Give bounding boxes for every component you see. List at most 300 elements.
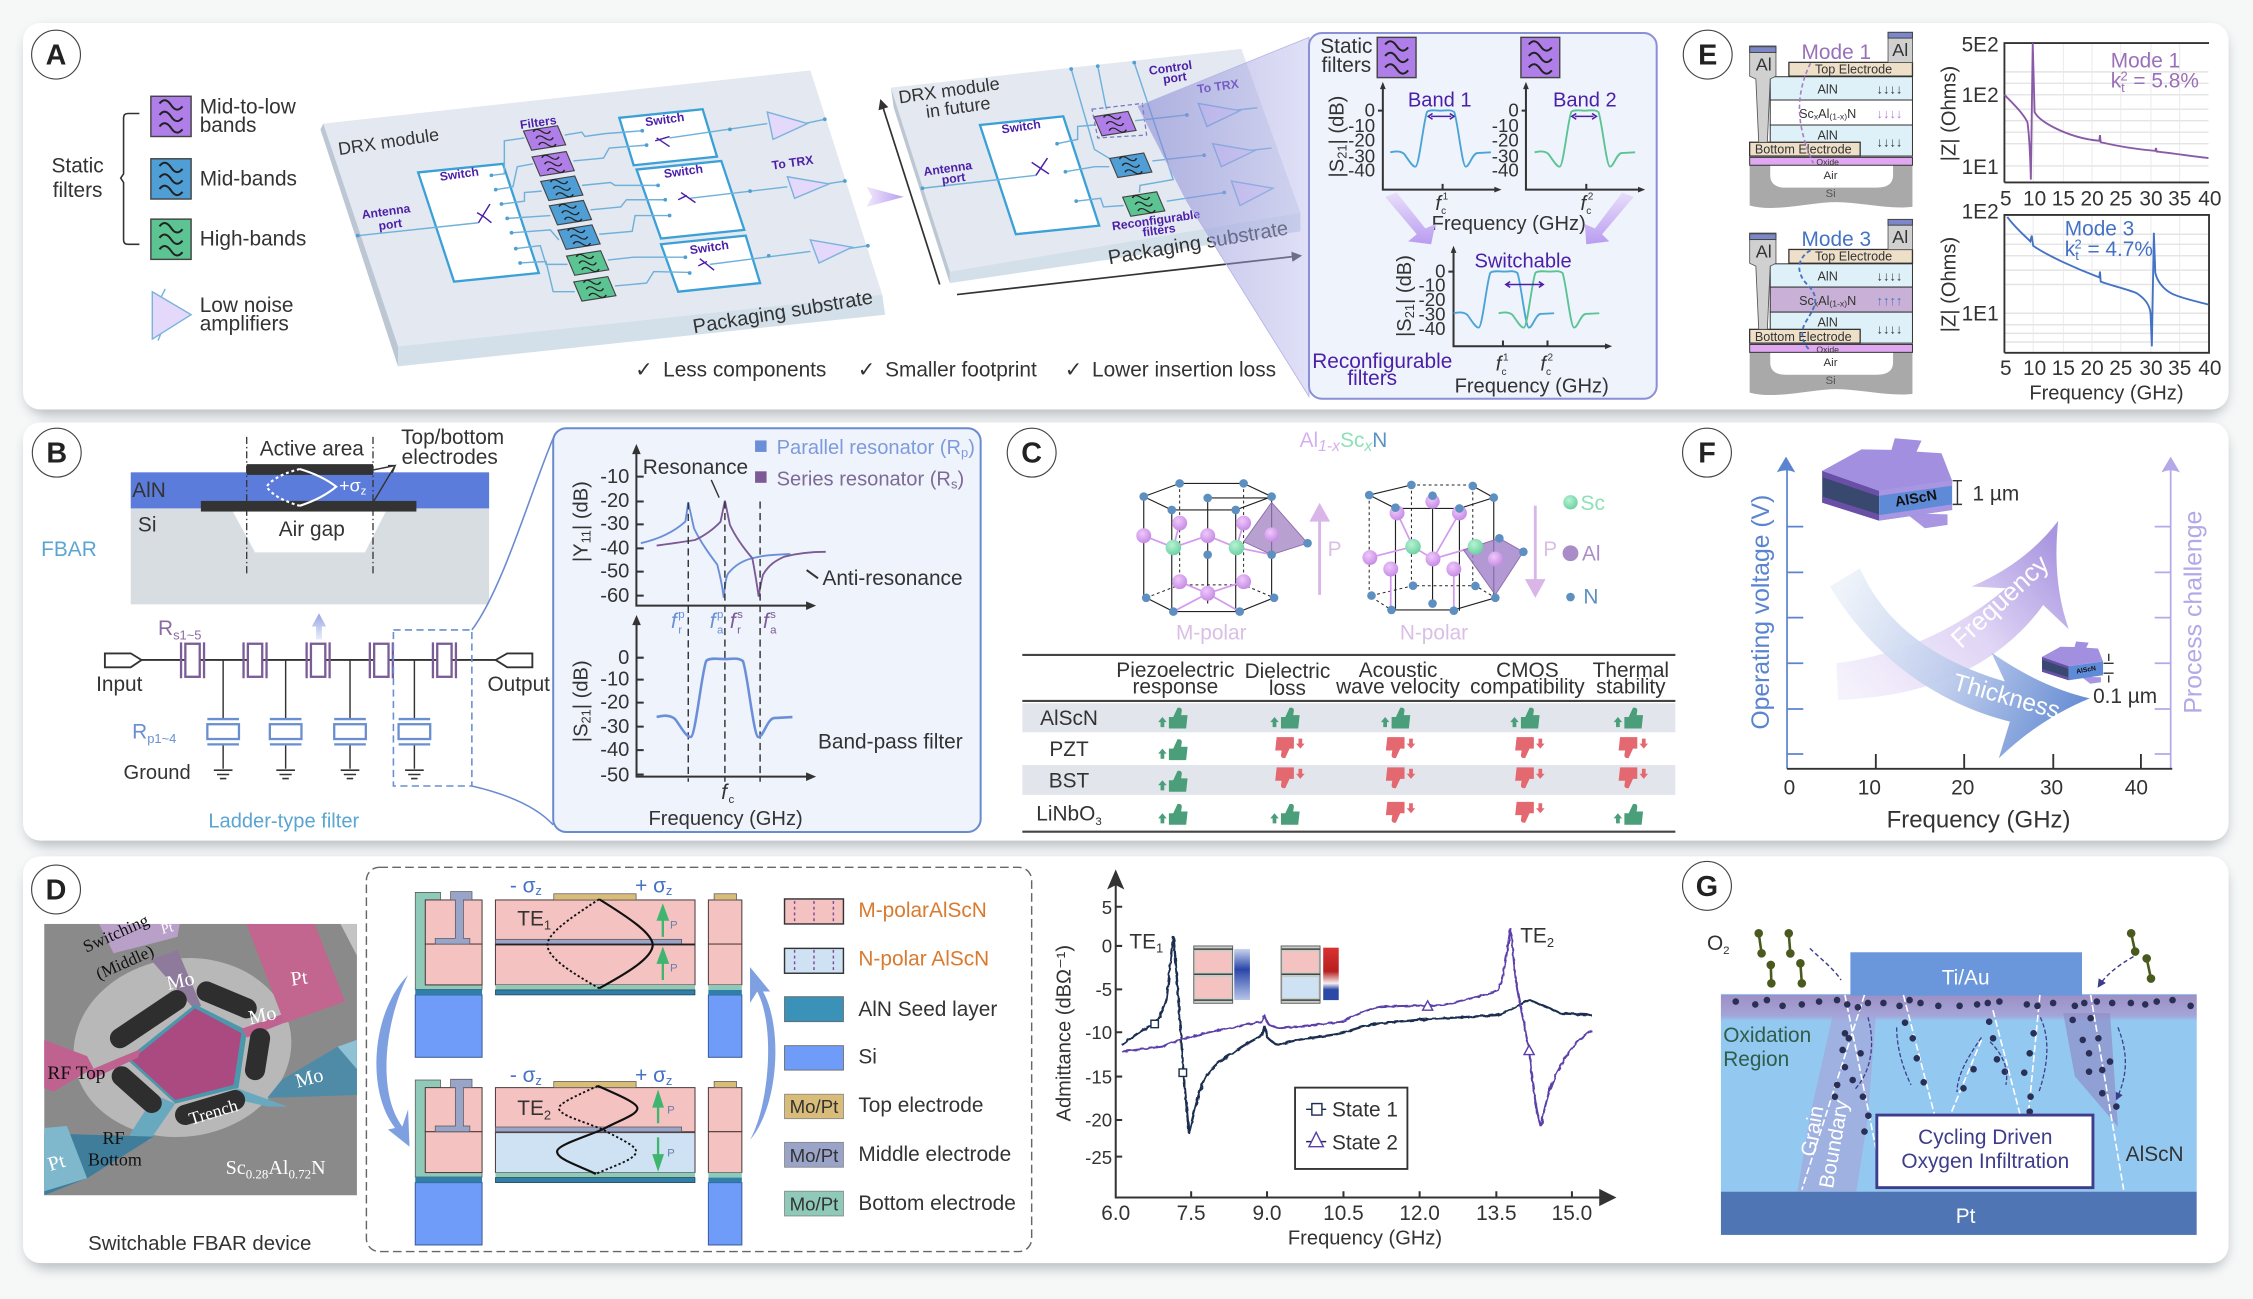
chart: switchable: -10 — [1419, 275, 1445, 296]
chart: switchable: Switchable — [1474, 250, 1572, 272]
packaging substrate: future DRX module: filters — [1142, 221, 1177, 240]
axes: 40 — [2125, 777, 2148, 800]
FBAR cross-section: Si — [138, 514, 156, 537]
packaging substrate: current DRX module — [320, 70, 885, 366]
series resonators — [181, 642, 456, 678]
chart: band 1: 21 — [1334, 144, 1349, 159]
chart: band 2: f — [1581, 193, 1589, 215]
chart: admittance: p — [961, 445, 968, 460]
chart: S21: -20 — [600, 691, 629, 713]
comparison table: LiNbO — [1036, 802, 1095, 825]
FBAR cross-section: +σ — [339, 475, 361, 495]
packaging substrate: current DRX module: Packaging substrate — [691, 287, 875, 338]
device state 2: - σ — [510, 1064, 535, 1087]
chart: admittance states: 13.5 — [1476, 1202, 1517, 1225]
packaging substrate: current DRX module: To TRX — [771, 153, 815, 173]
dimension: 0.1 um — [2093, 654, 2157, 708]
chart: admittance states — [1053, 869, 1616, 1249]
chart: admittance: | (dB) — [571, 481, 593, 530]
callout: filter bands: filters — [1347, 367, 1397, 390]
callout: filter bands: Reconfigurable — [1312, 350, 1452, 373]
O2 molecules — [1707, 932, 2151, 983]
FBAR cross-section: Top/bottom — [401, 426, 504, 449]
chart: band 2: -30 — [1492, 145, 1519, 166]
FBAR cross-section: electrodes — [402, 446, 498, 469]
chart: switchable: f — [1540, 354, 1548, 376]
chart: admittance: p — [717, 609, 723, 621]
arrow: frequency — [1836, 521, 2069, 700]
chart: admittance: 11 — [579, 530, 594, 543]
stack: mode 3: Al — [1756, 242, 1772, 262]
chart: impedance mode 1: 1E2 — [1962, 84, 1999, 107]
FBAR cross-section: Air gap — [279, 518, 345, 541]
chart: admittance: f — [730, 610, 738, 633]
stack: mode 1: Air — [1824, 170, 1838, 182]
switch boxes — [418, 109, 760, 292]
chart: switchable: 0 — [1435, 260, 1445, 281]
chart: band 2: Band 2 — [1553, 89, 1617, 111]
device state 2 — [415, 1064, 742, 1245]
chart: admittance states: Admittance (dBΩ⁻¹) — [1053, 945, 1075, 1121]
stack: mode 1: (1-x) — [1829, 111, 1847, 121]
chip: thin AlScN — [2042, 641, 2103, 684]
zoom selection — [393, 438, 553, 825]
arrows to switchable — [1385, 193, 1634, 244]
stack: mode 1: x — [1814, 111, 1819, 121]
stack: mode 3: AlN — [1818, 269, 1838, 283]
arrow: thickness — [1830, 568, 2090, 758]
chart legend: State 1 — [1332, 1099, 1398, 1122]
chart: impedance mode 3: 10 — [2023, 357, 2046, 380]
chart: impedance mode 3: 5 — [2000, 357, 2012, 380]
layer legend: Mo/Pt — [790, 1145, 839, 1166]
stack: mode 1: ↓↓↓↓ — [1877, 135, 1902, 150]
chart: S21: Band-pass filter — [818, 731, 963, 754]
chart: S21: |S — [571, 724, 593, 742]
device state 1: z — [535, 883, 542, 898]
packaging substrate: current DRX module: port — [378, 216, 403, 233]
dimension: 1 um: 1 µm — [1973, 483, 2019, 506]
label A: A — [46, 40, 66, 72]
layer legend: Top electrode — [858, 1094, 983, 1117]
chart: admittance: Anti-resonance — [822, 567, 963, 590]
FBAR cross-section: AlN — [132, 479, 166, 502]
label E: E — [1698, 40, 1717, 72]
ladder-type filter circuit: s1~5 — [173, 627, 201, 642]
crystal: M-polar — [1136, 479, 1342, 644]
footprint dimension arrows — [881, 101, 1300, 295]
device state 2: z — [535, 1073, 542, 1088]
stack: mode 3: AlN — [1818, 315, 1838, 329]
SEM micrograph: Mo — [246, 1002, 278, 1029]
layer legend: Mo/Pt — [790, 1096, 839, 1117]
grounds — [214, 770, 424, 779]
stack: mode 3: Oxide — [1816, 344, 1839, 354]
device state 1: P — [670, 919, 678, 931]
axes: 20 — [1951, 777, 1974, 800]
chart: admittance: f — [671, 610, 679, 633]
region labels: Grain — [1797, 1104, 1828, 1158]
chart: impedance mode 1: k — [2111, 70, 2121, 93]
chart: admittance: ) — [968, 437, 975, 459]
device state 1 — [415, 874, 742, 1057]
chart: switchable: -40 — [1419, 318, 1445, 339]
chart: impedance mode 1: 35 — [2168, 187, 2191, 210]
chart: admittance: Parallel resonator (R — [777, 437, 961, 459]
chart: band 1: -10 — [1348, 115, 1375, 136]
chart: band 1 — [1326, 82, 1502, 217]
stack: mode 1: Oxide — [1816, 157, 1839, 167]
stack: mode 1: Top Electrode — [1815, 62, 1892, 76]
label E — [1683, 30, 1732, 79]
chart: S21: -30 — [600, 716, 629, 738]
chart: impedance mode 3: 30 — [2139, 357, 2163, 380]
stack: mode 1: Al — [1818, 107, 1829, 121]
chart: impedance mode 3: 2 — [2074, 237, 2082, 252]
ladder-type filter circuit: Input — [96, 673, 143, 696]
callout: filter bands: Frequency (GHz) — [1432, 213, 1586, 235]
chart: band 1: 1 — [1443, 192, 1449, 203]
legend: static filters: Static — [52, 154, 104, 177]
stack: mode 1: Sc — [1799, 107, 1814, 121]
panel G: oxygen infiltration — [1683, 861, 2197, 1235]
stack: mode 3: x — [1814, 298, 1819, 308]
label D: D — [46, 875, 66, 907]
chart: band 2 — [1492, 82, 1645, 217]
panel B: FBAR and ladder filter — [32, 426, 981, 833]
packaging substrate: future DRX module: in future — [925, 93, 992, 122]
SEM micrograph: 0.28 — [246, 1166, 268, 1181]
SEM micrograph — [44, 910, 357, 1195]
cycle arrows — [376, 967, 775, 1147]
panel C: AlScN crystal structure and comparison — [1007, 428, 1675, 832]
stack: mode 3: Top Electrode — [1815, 249, 1892, 263]
chart: impedance mode 3 — [1939, 200, 2221, 404]
axes: 10 — [1858, 777, 1881, 800]
callout: resonator curves — [553, 428, 981, 832]
device state 1: z — [666, 883, 672, 898]
chart: admittance states: -10 — [1085, 1022, 1112, 1043]
comparison table: Thermal — [1593, 659, 1669, 682]
layer legend — [785, 899, 1016, 1216]
chart: switchable: c — [1502, 367, 1507, 378]
packaging substrate: future DRX module — [891, 49, 1300, 283]
crystal: N-polar — [1362, 481, 1557, 644]
layer legend: Bottom electrode — [858, 1192, 1016, 1215]
packaging substrate: future DRX module: Antenna — [923, 158, 973, 179]
switch boxes: Switch — [439, 165, 480, 184]
label: FBAR: FBAR — [41, 538, 97, 561]
chart: S21: f — [721, 781, 729, 804]
ladder-type filter circuit: p1~4 — [147, 731, 176, 746]
chart: S21: | (dB) — [571, 660, 593, 709]
packaging substrate: future DRX module: To TRX — [1196, 77, 1240, 96]
crystal: M-polar: P — [1328, 538, 1342, 561]
legend: low noise amplifiers — [152, 289, 294, 341]
arrow: frequency: Frequency — [1946, 550, 2055, 654]
chart: impedance mode 1: |Z| (Ohms) — [1939, 66, 1961, 161]
stack: mode 3: Al — [1892, 227, 1908, 247]
device state 1: TE — [517, 907, 544, 930]
wiring — [358, 119, 868, 292]
wire nodes — [358, 119, 868, 273]
comparison table: response — [1133, 675, 1218, 698]
chart: switchable — [1394, 246, 1612, 378]
SEM micrograph: 0.72 — [288, 1166, 311, 1181]
chart: impedance mode 1: = 5.8% — [2128, 70, 2199, 93]
chart: band 1: f — [1435, 193, 1443, 215]
chart: impedance mode 3: 20 — [2080, 357, 2104, 380]
SEM micrograph: Pt — [289, 967, 309, 991]
chart: admittance: p — [678, 609, 685, 621]
chip: thick AlScN — [1822, 438, 1952, 528]
SEM micrograph: Mo — [165, 968, 196, 995]
benefits list — [635, 358, 1276, 381]
stack: mode 1 — [1750, 32, 1912, 208]
chart: impedance mode 3: 40 — [2198, 357, 2221, 380]
benefits list: ✓ — [1065, 358, 1082, 381]
label F: F — [1698, 438, 1716, 470]
label G — [1683, 861, 1731, 910]
chart: admittance: a — [770, 625, 777, 637]
chart: S21: Frequency (GHz) — [649, 808, 803, 830]
legend: static filters: High-bands — [200, 228, 306, 251]
atom legend: Al — [1582, 542, 1601, 565]
ladder-type filter circuit: R — [158, 617, 173, 640]
stack: mode 1: Mode 1 — [1802, 41, 1871, 64]
label B — [32, 428, 81, 477]
SEM micrograph: Al — [268, 1157, 289, 1179]
panel F: thickness scaling chart — [1683, 428, 2207, 834]
comparison table: AlScN — [1040, 707, 1098, 730]
chart: admittance states: 5 — [1102, 897, 1112, 918]
callout: filter bands: filters — [1321, 54, 1371, 77]
chart: band 1: -40 — [1348, 160, 1375, 181]
comparison table: PZT — [1049, 738, 1089, 761]
region labels: AlScN — [2126, 1143, 2184, 1166]
dashed frame — [366, 867, 1032, 1252]
diffusion arrows — [1855, 1017, 2125, 1099]
dimension: 1 um — [1953, 481, 2019, 506]
stack: mode 3: Mode 3 — [1802, 228, 1871, 251]
benefits list: ✓ — [858, 358, 875, 381]
chart: S21: 21 — [579, 709, 594, 724]
SEM micrograph: Trench — [186, 1095, 240, 1129]
benefits list: Smaller footprint — [885, 358, 1037, 381]
chart: impedance mode 1: 25 — [2109, 187, 2132, 210]
chart: admittance states: Frequency (GHz) — [1288, 1227, 1442, 1249]
grain boundaries — [1802, 995, 2124, 1190]
amplifiers — [767, 112, 852, 263]
stack: mode 3: Al — [1818, 294, 1829, 308]
label C — [1007, 428, 1056, 477]
film stack: Ti/Au — [1942, 966, 1990, 989]
legend: static filters: Mid-to-low — [200, 96, 297, 119]
infiltration label box: Oxygen Infiltration — [1901, 1150, 2069, 1173]
packaging substrate: current DRX module: Antenna — [361, 201, 411, 222]
SEM micrograph: Sc — [226, 1157, 246, 1179]
SEM micrograph: Bottom — [88, 1149, 142, 1169]
chart: S21: -10 — [600, 668, 629, 690]
stack: mode 3: Bottom Electrode — [1755, 330, 1852, 344]
FBAR cross-section — [131, 426, 504, 604]
chart: band 1: |S — [1326, 159, 1348, 177]
comparison table: CMOS — [1496, 659, 1559, 682]
chart: admittance: s — [770, 609, 776, 621]
chip: thin AlScN: AlScN — [2076, 665, 2097, 676]
chart: admittance states: 15.0 — [1552, 1202, 1592, 1225]
chart: band 1: | (dB) — [1326, 96, 1348, 144]
oxygen atoms in film — [1736, 1000, 2191, 1132]
packaging substrate: future DRX module: port — [1162, 69, 1188, 87]
rating icons — [1158, 708, 1648, 825]
benefits list: Lower insertion loss — [1092, 358, 1276, 381]
stack: mode 1: N — [1847, 107, 1856, 121]
legend: static filters: filters — [53, 179, 102, 202]
SEM micrograph: Switching — [80, 910, 152, 956]
SEM micrograph: RF — [103, 1128, 125, 1148]
legend: static filters: bands — [200, 114, 256, 137]
comparison table: Piezoelectric — [1116, 659, 1234, 682]
transition arrow — [866, 187, 904, 207]
chart: admittance states: 10.5 — [1323, 1202, 1364, 1225]
chart: impedance mode 1: 15 — [2052, 187, 2075, 210]
ladder-type filter circuit — [96, 617, 550, 833]
chart: switchable: |S — [1394, 318, 1416, 337]
legend: static filters — [52, 96, 306, 259]
FBAR cross-section: z — [361, 485, 367, 497]
chart: impedance mode 1 — [1939, 34, 2221, 210]
chart: impedance mode 1: 40 — [2198, 187, 2221, 210]
chart: impedance mode 3: 15 — [2052, 357, 2075, 380]
chart: band 2: -20 — [1492, 130, 1519, 151]
chart: impedance mode 3: 1E2 — [1962, 200, 1999, 223]
packaging substrate: future DRX module: Reconfigurable — [1111, 207, 1201, 233]
chart: admittance states: 9.0 — [1253, 1202, 1282, 1225]
panel A: reconfigurable DRX modules — [32, 30, 1657, 399]
chart: switchable: c — [1546, 367, 1551, 378]
chart: impedance mode 1: t — [2121, 80, 2125, 95]
chart: impedance mode 1: Mode 1 — [2111, 50, 2180, 73]
stack: mode 3: ↓↓↓↓ — [1877, 322, 1902, 337]
packaging substrate: future DRX module: DRX module — [897, 73, 1001, 107]
stack: mode 1: Al — [1892, 40, 1908, 60]
chart: admittance: r — [678, 625, 682, 637]
chart: impedance mode 1: 5 — [2000, 187, 2012, 210]
SEM micrograph: Mo — [293, 1064, 326, 1093]
axes: 30 — [2040, 777, 2063, 800]
stack: mode 1: ↓↓↓↓ — [1877, 81, 1902, 96]
device state 1: - σ — [510, 874, 535, 897]
chart: S21: c — [728, 794, 734, 806]
device state 2: z — [666, 1073, 672, 1088]
chart: band 1: Band 1 — [1408, 89, 1472, 111]
benefits list: ✓ — [635, 358, 653, 381]
chart: admittance: -40 — [600, 538, 629, 560]
panel E: resonator modes — [1683, 30, 2221, 404]
chart: admittance states: 6.0 — [1101, 1202, 1130, 1225]
stack: mode 3: Sc — [1799, 294, 1814, 308]
chart: S21 — [571, 615, 963, 830]
chart: admittance states: TE — [1129, 930, 1156, 953]
arrow: thickness: Thickness — [1950, 669, 2063, 725]
chart: switchable: 2 — [1548, 353, 1554, 364]
chart: impedance mode 3: Mode 3 — [2065, 218, 2134, 241]
chart: switchable: | (dB) — [1394, 255, 1416, 304]
chart: impedance mode 1: 5E2 — [1962, 34, 1999, 57]
dimension: 0.1 um: 0.1 µm — [2093, 685, 2157, 708]
chart: band 1: c — [1441, 206, 1446, 217]
chart: impedance mode 1: 1E1 — [1962, 156, 1999, 179]
chart: switchable: f — [1496, 354, 1504, 376]
packaging substrate: current DRX module: DRX module — [337, 124, 440, 159]
comparison table: loss — [1269, 677, 1306, 700]
comparison table: Dielectric — [1245, 660, 1330, 683]
switch boxes: Switch — [689, 238, 730, 257]
SEM micrograph: RF Top — [47, 1063, 105, 1084]
chart: S21: -40 — [600, 739, 629, 761]
layer legend: N-polar AlScN — [858, 948, 989, 971]
device state 1: P — [670, 962, 678, 974]
chart legend: State 2 — [1332, 1132, 1398, 1155]
chart: admittance states: -20 — [1085, 1110, 1112, 1131]
region labels: Boundary — [1815, 1098, 1853, 1190]
chart: band 2: c — [1586, 206, 1591, 217]
crystal: N-polar: N-polar — [1400, 621, 1468, 644]
chart: band 2: -10 — [1492, 115, 1519, 136]
atom legend — [1563, 492, 1605, 609]
formula: x — [1363, 438, 1373, 455]
switch boxes: Switch — [663, 162, 704, 181]
SEM micrograph: Pt — [159, 919, 175, 938]
axes: Operating voltage (V) — [1748, 495, 1775, 730]
chart: admittance states: -25 — [1085, 1147, 1112, 1168]
stack: mode 1: ↓↓↓↓ — [1877, 106, 1902, 121]
comparison table: BST — [1049, 769, 1090, 792]
switch symbols — [477, 137, 714, 270]
comparison table: compatibility — [1470, 675, 1585, 698]
stack: mode 1: AlN — [1818, 128, 1838, 142]
comparison table: wave velocity — [1335, 675, 1461, 698]
packaging substrate: future DRX module: Packaging substrate — [1106, 218, 1290, 269]
device state 1: + σ — [635, 874, 666, 897]
axes: 0 — [1784, 777, 1795, 800]
infiltration label box — [1877, 1115, 2093, 1188]
device state 1: 1 — [544, 918, 551, 933]
atom legend: N — [1583, 586, 1598, 609]
comparison table — [1022, 655, 1675, 832]
chart: admittance: |Y — [571, 543, 593, 562]
stack: mode 1: Bottom Electrode — [1755, 143, 1852, 157]
chart: admittance: -10 — [600, 466, 629, 488]
chart: admittance: Resonance — [643, 456, 748, 479]
layer legend: Si — [858, 1045, 877, 1068]
callout: filter bands: Frequency (GHz) — [1455, 375, 1609, 397]
label D — [32, 865, 80, 914]
switch boxes: Switch — [644, 110, 685, 129]
panel D: switchable FBAR — [32, 861, 2197, 1255]
comparison table: Acoustic — [1359, 659, 1437, 682]
chart: band 2: 0 — [1508, 99, 1519, 120]
region labels: Region — [1723, 1048, 1789, 1071]
oxygen flow arrows — [1810, 948, 2133, 987]
layer legend: AlN Seed layer — [858, 998, 997, 1021]
crystal: N-polar: P — [1543, 538, 1557, 561]
chart: impedance mode 1: 10 — [2023, 187, 2046, 210]
film stack — [1721, 952, 2197, 1235]
chart: band 1: 0 — [1365, 99, 1375, 120]
O2 molecules: O — [1707, 932, 1723, 955]
